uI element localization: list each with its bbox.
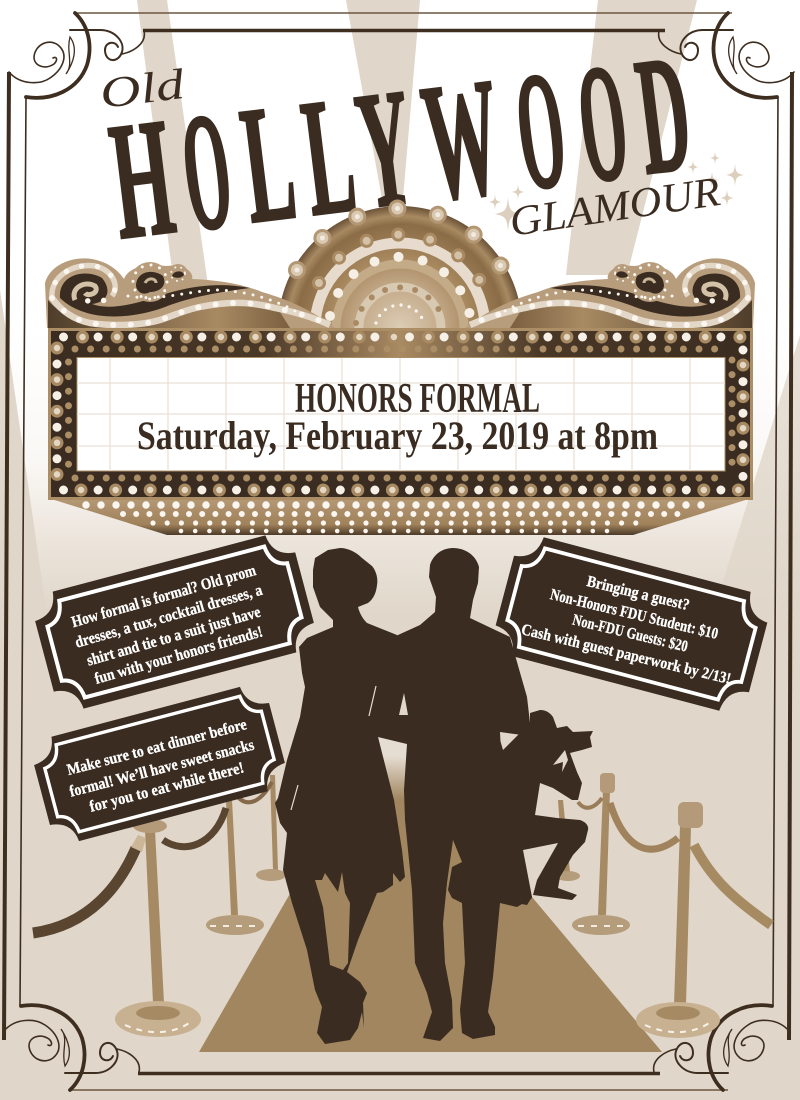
silhouette: photographer — [490, 710, 593, 905]
sign text: formal! We’ll have sweet snacks — [68, 737, 256, 801]
rear posts — [206, 775, 286, 935]
sign text — [70, 562, 265, 688]
arch bulbs — [297, 208, 503, 323]
sign text: Non-Honors FDU Student: $10 — [548, 586, 720, 643]
sign text — [65, 716, 256, 816]
marquee — [45, 206, 755, 535]
marquee screen — [77, 358, 725, 471]
sign plate — [28, 681, 291, 847]
sparkles — [489, 152, 744, 231]
bottom lines — [72, 1074, 728, 1090]
middle post — [572, 773, 630, 935]
ropes — [33, 782, 272, 933]
lower bulb band — [48, 498, 752, 535]
sign plate — [29, 529, 320, 715]
sign text: Non-FDU Guests: $20 — [571, 612, 689, 656]
marquee arch — [278, 206, 522, 450]
title: HOLLYWOOD: L — [294, 61, 364, 251]
sign text: Make sure to eat dinner before — [65, 716, 249, 779]
title: Old: Old — [97, 61, 187, 118]
sign text — [520, 573, 733, 688]
title: HOLLYWOOD: H — [102, 85, 183, 275]
sign: bringing a guest — [489, 531, 774, 717]
sign text: shirt and tie to a suit just have — [85, 604, 263, 670]
left lines — [4, 72, 26, 1040]
far post — [556, 800, 580, 881]
right scroll — [465, 258, 755, 328]
front post — [115, 819, 201, 1037]
silhouette: man — [367, 548, 532, 1041]
title: HOLLYWOOD: D — [628, 19, 700, 210]
spotlight beams — [0, 0, 800, 616]
corner ornament: top left — [9, 13, 144, 98]
event name: HONORS FORMAL — [295, 376, 540, 422]
front post — [636, 802, 720, 1038]
title: HOLLYWOOD: W — [414, 43, 509, 236]
title: GLAMOUR: GLAMOUR — [507, 169, 723, 246]
sign: how formal is formal — [29, 529, 320, 715]
sign text: Cash with guest paperwork by 2/13! — [520, 621, 733, 688]
velvet rope stanchions left — [33, 775, 286, 1037]
sign plate — [489, 531, 774, 717]
sign text: fun with your honors friends! — [93, 624, 265, 688]
top lines — [75, 13, 732, 30]
sign text: How formal is formal? Old prom — [70, 562, 258, 631]
sign: eat dinner before formal — [28, 681, 291, 847]
dress sliver highlight — [291, 686, 376, 810]
title: HOLLYWOOD: Y — [348, 53, 422, 244]
event date: Saturday, February 23, 2019 at 8pm — [137, 413, 658, 458]
title: HOLLYWOOD — [102, 19, 700, 275]
sign text: Bringing a guest? — [585, 573, 691, 614]
velvet rope stanchions right — [556, 773, 771, 1038]
title: HOLLYWOOD: L — [233, 68, 304, 258]
sign text: for you to eat while there! — [88, 760, 246, 816]
corner ornament: bottom right — [654, 1005, 789, 1090]
frame bulbs — [57, 337, 743, 490]
sign text: dresses, a tux, cocktail dresses, a — [73, 582, 264, 652]
silhouette: woman — [275, 548, 405, 1044]
left scroll — [45, 258, 335, 328]
right lines — [773, 72, 792, 1040]
marquee frame — [50, 330, 752, 498]
title: HOLLYWOOD: O — [507, 38, 575, 226]
title: HOLLYWOOD: O — [173, 79, 241, 267]
corner ornament: top right — [659, 13, 794, 98]
red carpet — [199, 737, 662, 1052]
title: HOLLYWOOD: O — [569, 30, 637, 219]
corner ornament: bottom left — [4, 1005, 139, 1090]
ropes — [578, 798, 771, 925]
